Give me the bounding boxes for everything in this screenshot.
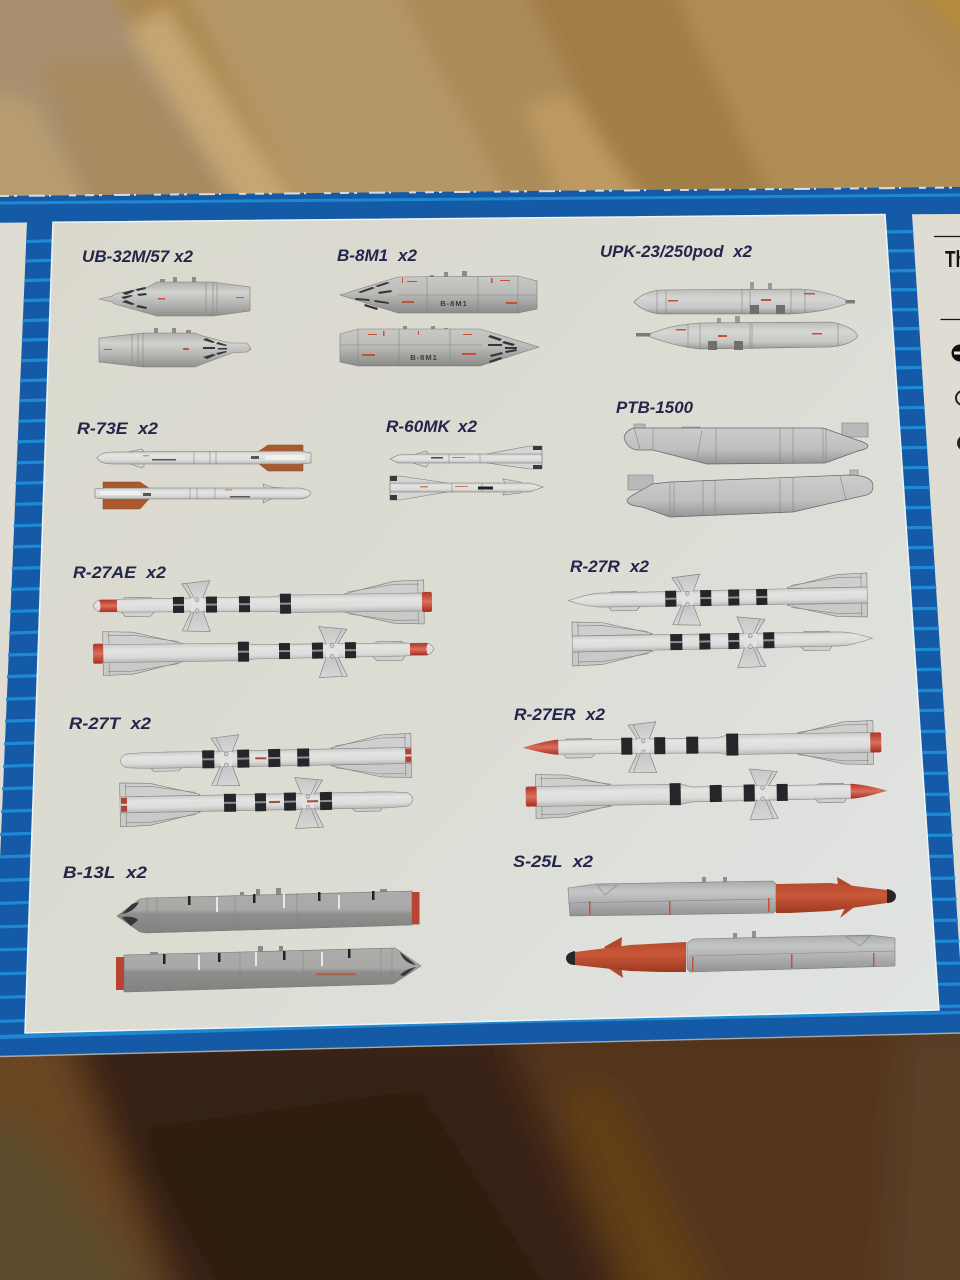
rocket upper xyxy=(568,877,896,918)
item: UB-32M/57 xyxy=(82,248,251,367)
item: B-8M1 xyxy=(337,247,539,366)
rocket pod upper xyxy=(117,888,420,933)
gun pod lower xyxy=(636,316,858,350)
right neighbouring panel xyxy=(912,214,960,960)
item: R-27AE xyxy=(73,564,434,681)
drop tank lower xyxy=(627,470,873,517)
missile lower xyxy=(572,614,873,671)
label: B-13L x2 xyxy=(63,864,147,882)
item: PTB-1500 xyxy=(616,399,873,517)
rocket lower xyxy=(566,931,895,978)
right striped column xyxy=(880,231,960,1007)
item: R-27R xyxy=(568,558,873,671)
missile upper xyxy=(390,446,542,469)
missile lower xyxy=(390,476,543,500)
worn top edge xyxy=(0,188,960,196)
missile upper xyxy=(93,578,432,633)
label: R-27ER x2 xyxy=(514,706,605,724)
label: UPK-23/250pod x2 xyxy=(600,243,752,261)
item: B-13L xyxy=(63,864,421,992)
icon: bullet two xyxy=(956,391,960,405)
weapons panel contents xyxy=(63,243,896,992)
missile lower xyxy=(95,482,311,509)
missile upper xyxy=(568,571,868,628)
background: upper wood floor xyxy=(0,0,960,240)
label: R-27R x2 xyxy=(570,558,649,576)
gun pod upper xyxy=(634,282,855,314)
label: R-27AE x2 xyxy=(73,564,166,582)
box top light blue line xyxy=(0,194,960,204)
item: R-27ER xyxy=(514,706,887,824)
box bottom light blue line xyxy=(0,1011,960,1039)
box outline xyxy=(934,236,960,320)
rocket pod lower xyxy=(99,328,251,367)
item: R-27T xyxy=(69,715,414,832)
icon: bullet three xyxy=(957,436,960,450)
left neighbouring panel xyxy=(0,222,27,860)
right instruction box xyxy=(934,236,960,450)
drop tank upper xyxy=(624,423,868,464)
label: R-73E x2 xyxy=(77,420,158,438)
rocket pod upper: B-8M1 xyxy=(440,299,468,308)
box blue surface xyxy=(0,187,960,1057)
main white panel xyxy=(25,214,939,1033)
rocket pod lower xyxy=(116,946,421,992)
item: R-60MK xyxy=(386,418,543,500)
rocket pod upper xyxy=(99,277,250,316)
label: S-25L x2 xyxy=(513,853,593,871)
left striped column xyxy=(0,239,52,1023)
rocket pod lower: B-8M1 xyxy=(410,353,438,362)
missile upper xyxy=(97,445,311,471)
product box side xyxy=(0,187,960,1057)
icon: bullet one xyxy=(952,344,960,362)
missile upper xyxy=(523,718,882,775)
item: S-25L xyxy=(513,853,896,978)
label: UB-32M/57 x2 xyxy=(82,248,193,266)
item: UPK-23/250 xyxy=(600,243,858,350)
missile lower xyxy=(525,767,887,824)
item: R-73E xyxy=(77,420,311,509)
label: PTB-1500 xyxy=(616,399,694,417)
rocket pod lower xyxy=(340,326,539,366)
label: R-60MK x2 xyxy=(386,418,477,436)
label: B-8M1 x2 xyxy=(337,247,417,265)
missile upper xyxy=(120,731,412,788)
label: R-27T x2 xyxy=(69,715,151,733)
missile lower xyxy=(93,625,434,681)
rocket pod upper xyxy=(340,271,537,313)
worn bottom edge xyxy=(0,1033,960,1056)
background: lower wood floor xyxy=(0,1020,960,1280)
missile lower xyxy=(120,775,414,832)
